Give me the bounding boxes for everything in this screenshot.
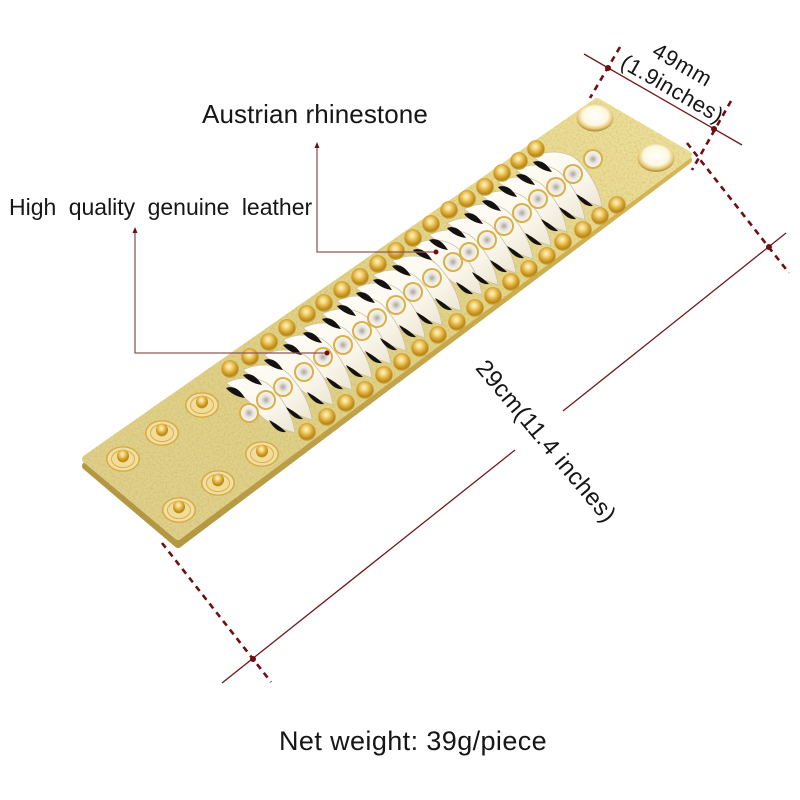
bracelet leather face: [86, 102, 688, 536]
panel: bracelet: [86, 102, 688, 544]
black slots: [226, 161, 593, 432]
dimension: width 49mm: [584, 38, 742, 170]
leader: genuine leather: [132, 227, 330, 356]
white feathers: [226, 152, 602, 433]
leader: Austrian rhinestone: [314, 142, 438, 254]
large snap buttons: [576, 104, 674, 172]
dimension: length 29cm: [162, 143, 789, 683]
29cm text: 29cm(11.4 inches): [470, 355, 621, 528]
net weight: Net weight: 39g/piece: [279, 726, 547, 756]
bracelet edge: [86, 106, 688, 544]
label: Austrian rhinestone: Austrian rhinestone: [202, 99, 428, 129]
1.9 inches text: (1.9inches): [617, 49, 728, 128]
snap rivets: [106, 392, 279, 523]
lower stud row: [298, 196, 626, 440]
upper stud row: [222, 140, 544, 378]
rhinestones: [239, 149, 603, 423]
49mm text: 49mm: [648, 38, 716, 91]
label: leather: High quality genuine leather: [9, 194, 312, 220]
